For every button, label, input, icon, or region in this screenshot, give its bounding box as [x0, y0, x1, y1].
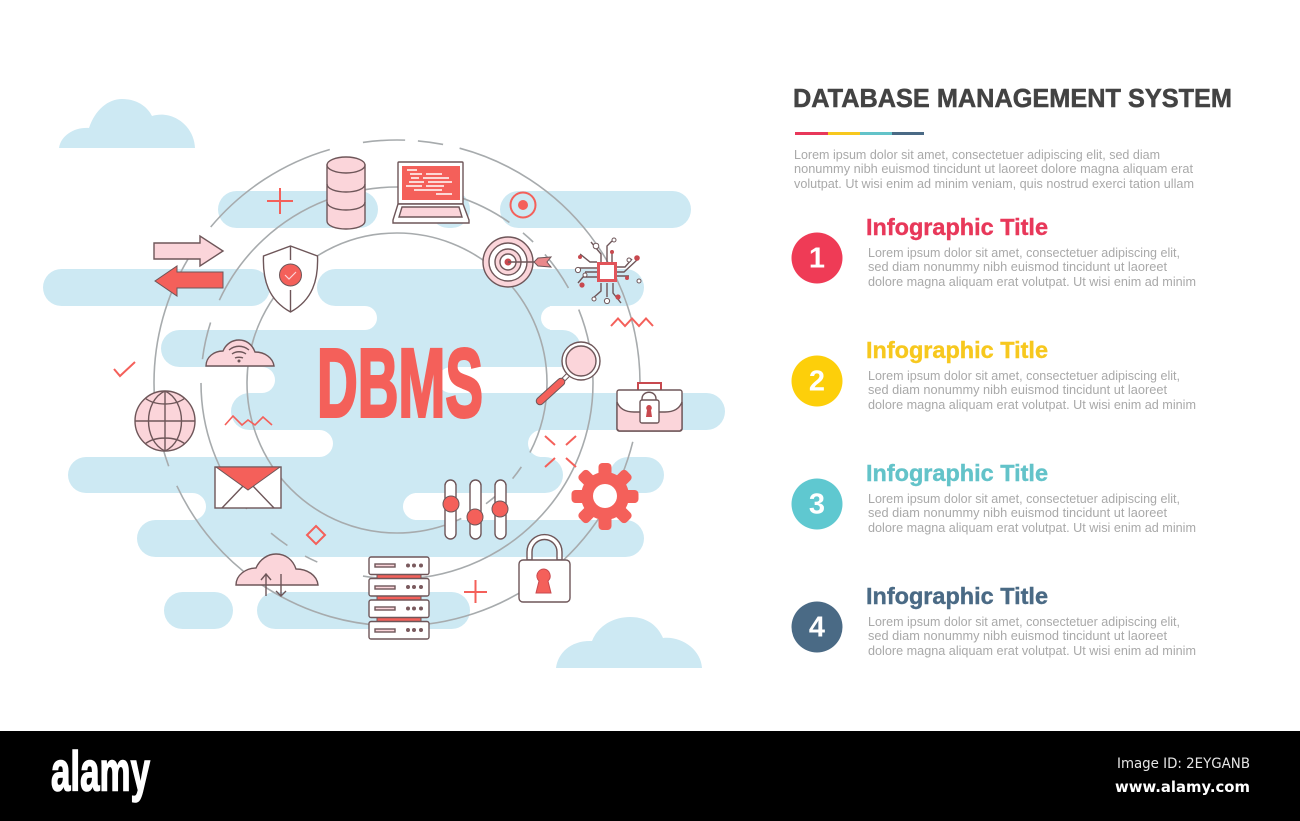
item 1: Infographic Title — [866, 214, 1048, 240]
item 1: sed diam nonummy nibh euismod tincidunt ut laoreet — [868, 260, 1168, 274]
icon: laptop with code — [393, 162, 469, 223]
icon: envelope — [215, 467, 281, 508]
item 1: 1 — [809, 242, 825, 274]
icon: database cylinder — [327, 157, 365, 229]
item 2: dolore magna aliquam erat volutpat. Ut wisi enim ad minim — [868, 398, 1196, 412]
decoration: diamond — [307, 526, 325, 544]
item 2: Infographic Title — [866, 337, 1048, 363]
item 4: Infographic Title — [866, 583, 1048, 609]
item 4: dolore magna aliquam erat volutpat. Ut wisi enim ad minim — [868, 644, 1196, 658]
central label: DBMS: DBMS — [317, 328, 483, 438]
item 1 — [792, 214, 1196, 289]
icon: server rack — [369, 557, 429, 639]
concentric dashed rings — [154, 140, 640, 626]
icon: red gear — [572, 463, 638, 530]
intro text block — [794, 148, 1194, 191]
item 4 — [792, 583, 1196, 658]
item 3: dolore magna aliquam erat volutpat. Ut wisi enim ad minim — [868, 521, 1196, 535]
intro text block: Lorem ipsum dolor sit amet, consectetuer adipiscing elit, sed diam — [794, 148, 1160, 162]
decoration: plus right — [464, 580, 487, 603]
icon: magnifying glass — [540, 342, 600, 401]
item 2: 2 — [809, 366, 825, 398]
item 1: Lorem ipsum dolor sit amet, consectetuer adipiscing elit, — [868, 246, 1180, 260]
title colour rule — [795, 132, 924, 135]
item 2: sed diam nonummy nibh euismod tincidunt ut laoreet — [868, 383, 1168, 397]
item 3: sed diam nonummy nibh euismod tincidunt ut laoreet — [868, 506, 1168, 520]
icon: pink right arrow — [154, 236, 223, 266]
decoration: zigzag left — [225, 416, 272, 425]
icon: briefcase with lock — [617, 383, 682, 431]
icon: globe — [135, 391, 195, 451]
item 3: 3 — [809, 488, 825, 520]
decoration: spark lines — [545, 436, 576, 467]
decoration: plus left — [267, 188, 293, 214]
decoration: check mark — [114, 362, 135, 376]
icon: padlock — [519, 535, 570, 602]
item 4: Lorem ipsum dolor sit amet, consectetuer adipiscing elit, — [868, 615, 1180, 629]
item 3: Infographic Title — [866, 460, 1048, 486]
footer bar with watermark — [0, 731, 1300, 821]
item 4: sed diam nonummy nibh euismod tincidunt ut laoreet — [868, 629, 1168, 643]
icon: security shield — [263, 246, 318, 312]
intro text block: volutpat. Ut wisi enim ad minim veniam, quis nostrud exerci tation ullam — [794, 177, 1194, 191]
icon: small target dot — [510, 192, 536, 218]
decoration: zigzag right — [611, 318, 653, 326]
footer bar with watermark: Image ID: 2EYGANB — [1117, 756, 1250, 772]
icon: cloud with up and down arrows — [236, 554, 318, 596]
item 2: Lorem ipsum dolor sit amet, consectetuer adipiscing elit, — [868, 369, 1180, 383]
item 3 — [792, 460, 1196, 535]
footer bar with watermark: www.alamy.com — [1115, 778, 1250, 796]
title: DATABASE MANAGEMENT SYSTEM — [793, 83, 1232, 113]
item 1: dolore magna aliquam erat volutpat. Ut wisi enim ad minim — [868, 275, 1196, 289]
icon: target with arrow — [483, 237, 551, 287]
footer bar with watermark: alamy — [51, 740, 150, 802]
item 4: 4 — [809, 612, 825, 644]
item 2 — [792, 337, 1196, 412]
icon: sliders — [443, 480, 508, 539]
background blue band shapes — [43, 99, 725, 668]
icon: wifi cloud — [206, 340, 274, 366]
icon: coral left arrow — [155, 266, 223, 296]
intro text block: nonummy nibh euismod tincidunt ut laoreet dolore magna aliquam erat — [794, 162, 1194, 176]
icon: microchip circuit — [575, 238, 641, 304]
item 3: Lorem ipsum dolor sit amet, consectetuer adipiscing elit, — [868, 492, 1180, 506]
